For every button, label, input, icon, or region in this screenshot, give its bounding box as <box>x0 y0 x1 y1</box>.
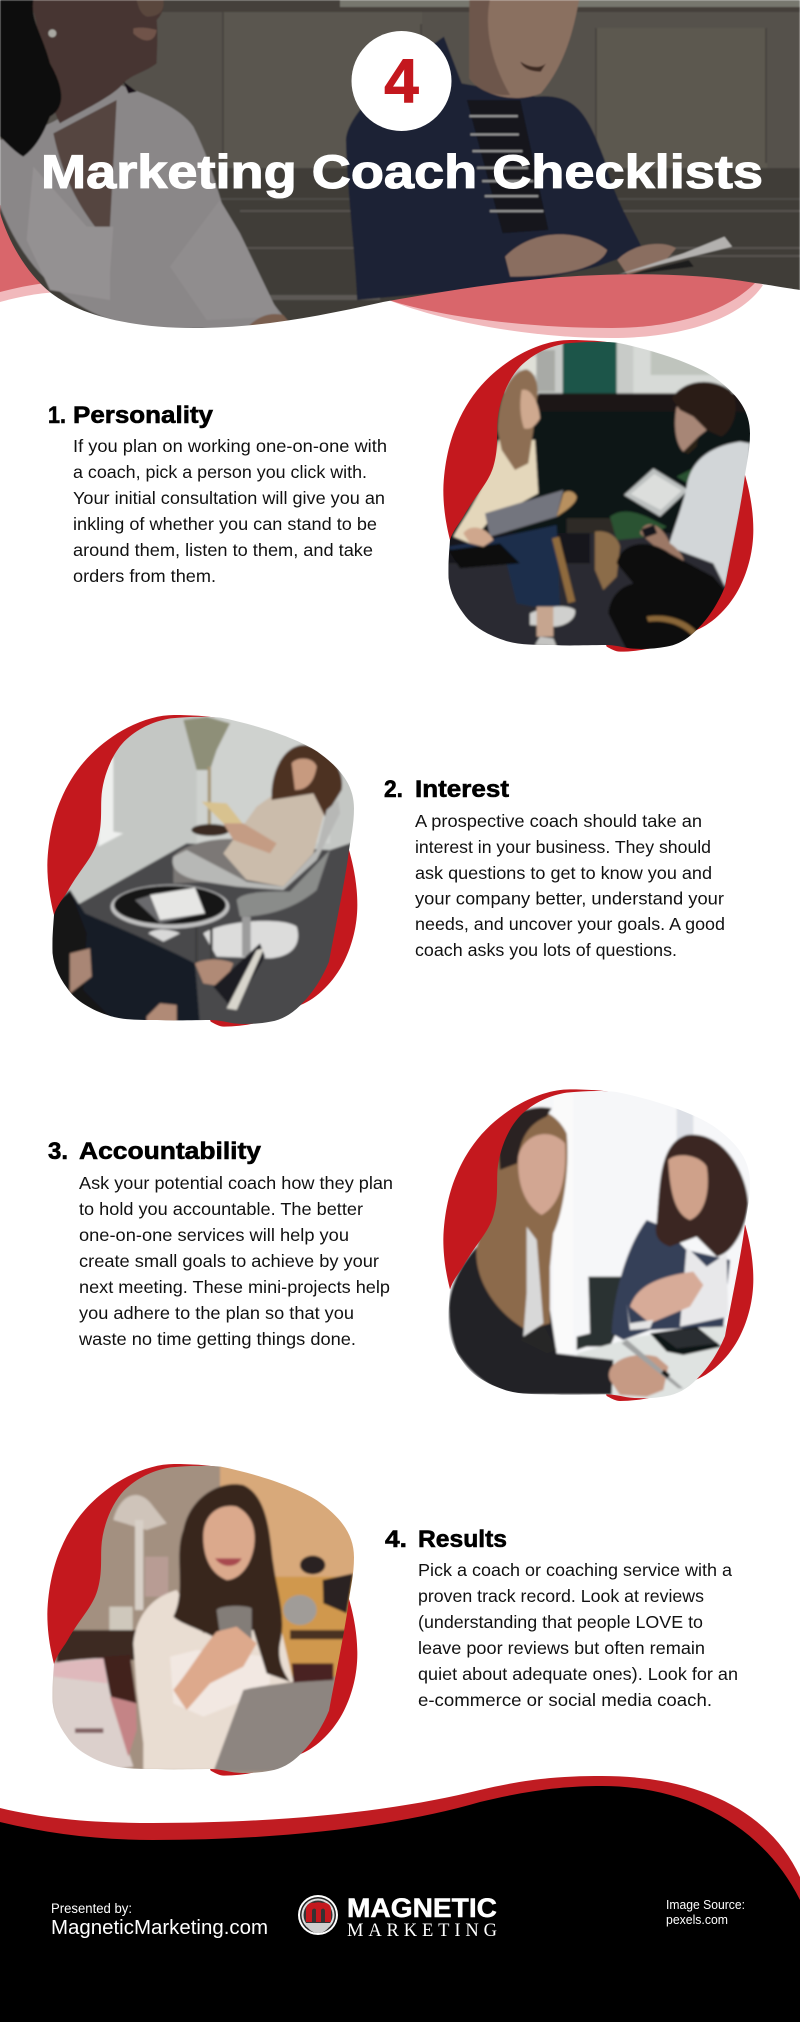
chair <box>173 800 340 890</box>
number badge <box>352 31 452 131</box>
red blob 2 <box>47 715 357 1027</box>
photo: two women in a meeting <box>440 1087 757 1407</box>
woman <box>173 839 250 883</box>
body text: ask questions to get to know you and <box>415 863 712 883</box>
image source <box>666 1898 745 1927</box>
presented by: MagneticMarketing.com <box>51 1917 268 1939</box>
laptop <box>213 1680 333 1772</box>
body text: Your initial consultation will give you an <box>73 488 385 508</box>
red blob 1 <box>443 340 753 652</box>
table <box>111 885 229 929</box>
logo <box>298 1893 497 1941</box>
body text: leave poor reviews but often remain <box>418 1638 705 1658</box>
heading: Results <box>418 1526 507 1553</box>
logo: MAGNETIC <box>347 1893 497 1923</box>
panel: item 3 photo blob <box>440 1087 757 1407</box>
body text: to hold you accountable. The better <box>79 1199 363 1219</box>
body text <box>418 1560 738 1710</box>
heading: Personality <box>73 402 214 429</box>
image source: Image Source: <box>666 1898 745 1912</box>
man <box>595 531 620 590</box>
panel: item 4 text <box>385 1526 738 1710</box>
chair <box>577 1277 622 1350</box>
heading: Interest <box>415 776 509 803</box>
pillows <box>52 1658 133 1770</box>
body text: proven track record. Look at reviews <box>418 1586 704 1606</box>
body text <box>73 436 387 586</box>
presented by <box>51 1901 268 1939</box>
body text: If you plan on working one-on-one with <box>73 436 387 456</box>
heading: 4. <box>385 1526 407 1553</box>
table <box>577 1325 727 1400</box>
panel: item 1 text <box>48 402 387 586</box>
right woman <box>612 1220 730 1340</box>
header photo <box>0 0 800 340</box>
body text: A prospective coach should take an <box>415 811 702 831</box>
icon: magnet rings <box>298 1895 338 1935</box>
hair <box>173 1484 290 1682</box>
body text <box>415 811 725 960</box>
body text: a coach, pick a person you click with. <box>73 462 367 482</box>
red footer wave <box>0 1776 800 2022</box>
presented by: Presented by: <box>51 1901 132 1916</box>
body text: next meeting. These mini-projects help <box>79 1277 390 1297</box>
body text: needs, and uncover your goals. A good <box>415 914 725 934</box>
panel: item 2 text <box>384 776 725 960</box>
tablet <box>650 1327 722 1355</box>
foreground person <box>69 890 200 1020</box>
title: Marketing Coach Checklists <box>41 145 763 198</box>
woman <box>453 440 538 543</box>
right red wave <box>383 270 755 328</box>
panel: item 1 photo blob <box>440 337 757 657</box>
black footer wave <box>0 1786 800 2022</box>
body text: orders from them. <box>73 566 216 586</box>
right pink wave <box>383 280 763 338</box>
body text: e-commerce or social media coach. <box>418 1690 712 1710</box>
body text: your company better, understand your <box>415 888 724 908</box>
sofa <box>57 1655 137 1703</box>
red blob 4 <box>47 1464 357 1776</box>
body text: waste no time getting things done. <box>78 1329 356 1349</box>
body text: around them, listen to them, and take <box>73 540 373 560</box>
body text: coach asks you lots of questions. <box>415 940 677 960</box>
body text: interest in your business. They should <box>415 837 711 857</box>
body text: create small goals to achieve by your <box>79 1251 379 1271</box>
body text <box>78 1173 393 1349</box>
left red wave <box>0 205 60 292</box>
body text: quiet about adequate ones). Look for an <box>418 1664 738 1684</box>
logo: MARKETING <box>347 1921 497 1941</box>
heading: 1. <box>48 402 66 429</box>
body text: Pick a coach or coaching service with a <box>418 1560 732 1580</box>
left pink wave <box>0 205 60 302</box>
left woman <box>448 1246 615 1395</box>
phone and hand <box>217 1606 252 1650</box>
panel: item 4 photo blob <box>43 1460 360 1780</box>
red blob 3 <box>443 1089 753 1401</box>
heading: Accountability <box>79 1138 262 1165</box>
man <box>346 0 732 300</box>
panel: footer <box>0 1776 800 2022</box>
panel: item 3 text <box>48 1138 393 1349</box>
panel: header <box>0 0 800 340</box>
woman <box>0 0 290 328</box>
blouse <box>133 1590 293 1770</box>
body text: you adhere to the plan so that you <box>79 1303 354 1323</box>
photo: two people with laptop and tablet <box>440 337 757 657</box>
number badge: 4 <box>384 47 419 116</box>
body text: inkling of whether you can stand to be <box>73 514 377 534</box>
body text: Ask your potential coach how they plan <box>79 1173 393 1193</box>
shelf objects <box>113 1495 167 1530</box>
body text: (understanding that people LOVE to <box>418 1612 703 1632</box>
image source: pexels.com <box>666 1913 728 1927</box>
body text: one-on-one services will help you <box>79 1225 349 1245</box>
heading: 3. <box>48 1138 68 1165</box>
panel: item 2 photo blob <box>43 710 360 1030</box>
heading <box>384 776 509 803</box>
photo: woman looking at smartphone <box>43 1460 360 1780</box>
heading: 2. <box>384 776 403 803</box>
photo: woman in white chair reading <box>43 710 360 1030</box>
